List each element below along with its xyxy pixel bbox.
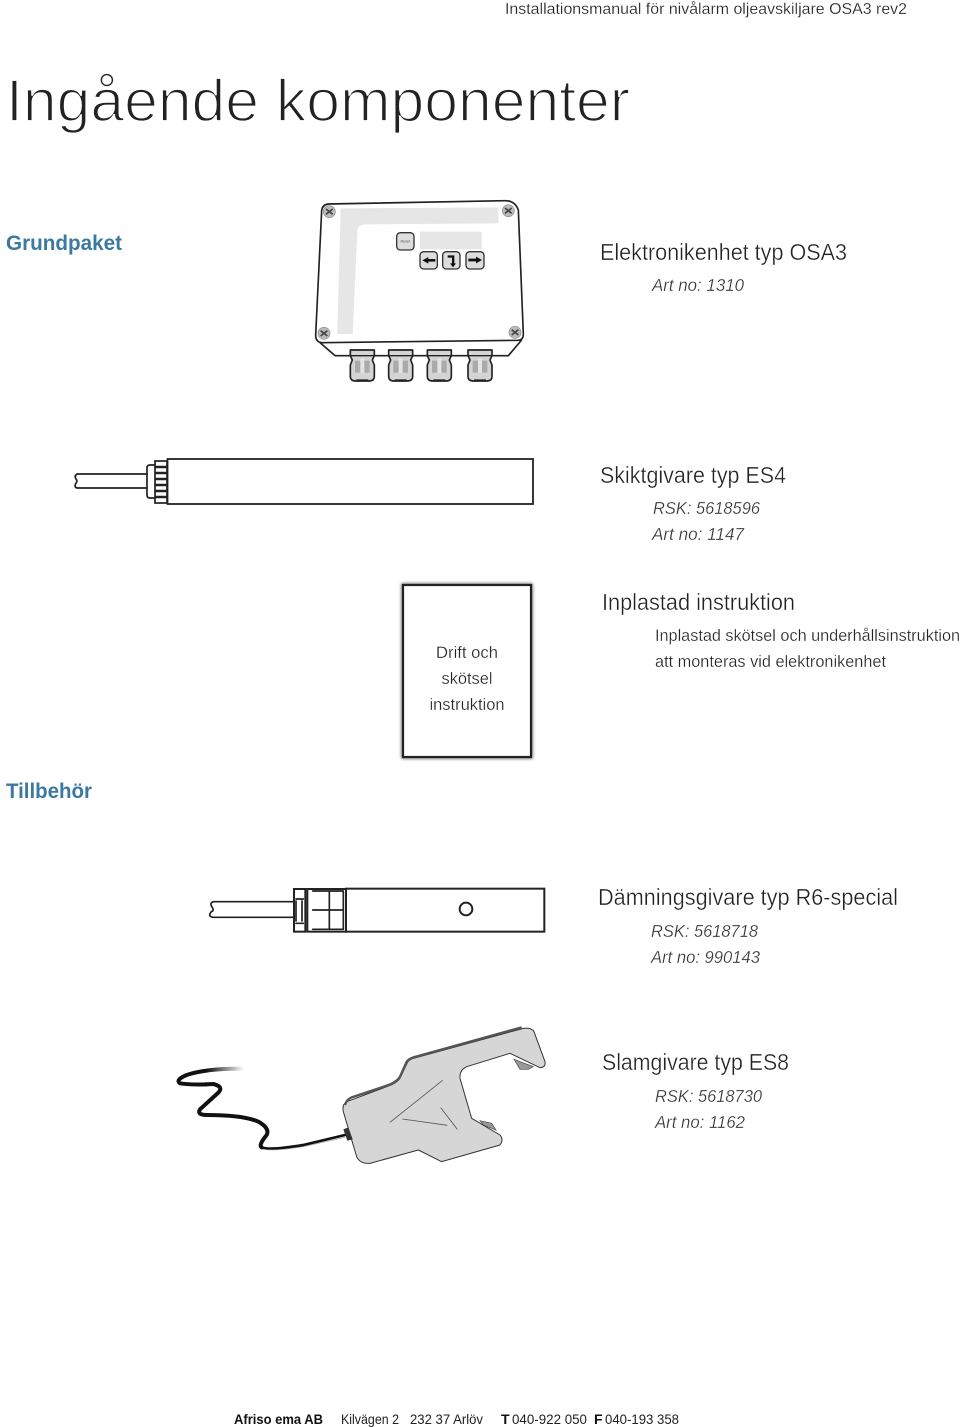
text block: ES8: Slamgivare typ ES8 [602,1049,789,1075]
screws [318,205,521,339]
text block: ES4: Skiktgivare typ ES4 [600,462,786,488]
text block: R6-special: Dämningsgivare typ R6-special [598,884,898,910]
text block: ES8: Art no: 1162 [654,1112,745,1132]
footer: F [594,1411,603,1427]
text block: instruction: Inplastad instruktion [602,589,795,615]
reset button: Reset [401,240,410,244]
illustration: R6-special sensor [210,889,544,932]
text block: R6-special: Art no: 990143 [650,947,760,967]
footer [234,1411,679,1427]
footer: 040-193 358 [605,1411,679,1427]
title: Ingående komponenter [6,68,630,134]
text block: OSA3: Elektronikenhet typ OSA3 [600,239,847,265]
instruction card: instruktion [430,695,504,714]
footer: 232 37 Arlöv [410,1411,483,1427]
text block: instruction [602,589,960,671]
footer: Kilvägen 2 [341,1411,399,1427]
illustration: OSA3 electronics unit [316,201,523,381]
page header: Installationsmanual för nivålarm oljeavskiljare OSA3 rev2 [505,0,907,18]
text block: ES8 [602,1049,789,1132]
arrow buttons [420,252,484,269]
reset button [397,233,414,250]
text block: instruction: att monteras vid elektronikenhet [655,652,886,671]
text block: R6-special [598,884,898,967]
cable [178,1069,345,1150]
text block: ES4: RSK: 5618596 [653,498,760,518]
text block: R6-special: RSK: 5618718 [651,921,758,941]
instruction card: skötsel [442,669,492,688]
footer: T [501,1411,510,1427]
text block: ES8: RSK: 5618730 [655,1086,762,1106]
footer: Afriso ema AB [234,1411,323,1427]
footer: 040-922 050 [512,1411,587,1427]
text block: ES4: Art no: 1147 [651,524,745,544]
instruction card [403,585,531,757]
text block: OSA3: Art no: 1310 [651,275,744,295]
text block: ES4 [600,462,786,544]
illustration: ES4 layer sensor [75,459,533,504]
section heading: Tillbehör: Tillbehör [6,780,92,803]
section heading: Grundpaket: Grundpaket [6,232,122,255]
text block: OSA3 [600,239,847,295]
instruction card: Drift och [436,643,498,662]
cable glands [350,350,492,381]
illustration: ES8 sludge sensor [178,1027,545,1163]
